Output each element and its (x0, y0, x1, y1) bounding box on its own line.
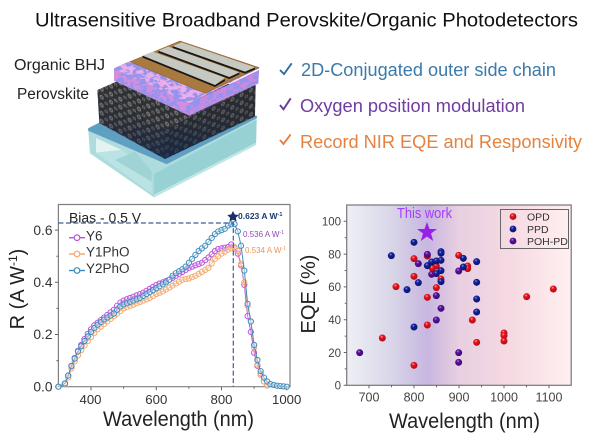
x axis title: Wavelength (nm) (389, 410, 540, 433)
value: Y2PhO peak: 0.623 A W (238, 211, 278, 221)
metal electrode strips (143, 42, 255, 87)
y tick labels: 80 (328, 250, 341, 262)
bullet 1: 2D-Conjugated outer side chain (301, 59, 556, 80)
bullet 2: Oxygen position modulation (300, 96, 525, 116)
curve: Y2PhO (58, 224, 287, 387)
y axis title: EQE (%) (298, 255, 320, 333)
value: Y1PhO peak: 0.534 A W (245, 246, 281, 255)
y axis title: -1 (6, 255, 20, 266)
y tick labels: 20 (328, 348, 341, 360)
x tick labels: 600 (145, 392, 167, 407)
value: Y1PhO peak: -1 (281, 246, 286, 252)
responsivity chart (6, 204, 301, 431)
legend: Y2PhO (86, 261, 130, 276)
value: Y6 peak: 0.536 A W (243, 230, 279, 239)
x tick labels: 800 (210, 392, 233, 407)
curve: Y1PhO (58, 247, 267, 387)
glass substrate box (88, 118, 257, 197)
points: OPD (379, 252, 557, 369)
icon: check purple (280, 98, 291, 109)
label: Perovskite: Perovskite (17, 86, 89, 103)
label: Organic BHJ: Organic BHJ (14, 57, 105, 74)
brown interlayer (130, 41, 259, 93)
points: PPD (388, 239, 480, 330)
perovskite block (97, 80, 256, 159)
y tick labels: 100 (322, 216, 341, 228)
icon: peak star (227, 211, 239, 222)
legend: OPD (527, 212, 550, 224)
y tick labels: 0.4 (33, 275, 53, 290)
title: Ultrasensitive Broadband Perovskite/Organic Photodetectors (35, 10, 578, 32)
x tick labels: 1000 (490, 390, 518, 404)
y axis title: ) (7, 249, 29, 255)
peak dashed guide lines (58, 223, 233, 387)
icon: check orange (280, 134, 291, 144)
organic BHJ layer (114, 61, 259, 116)
x tick labels: 1100 (536, 390, 562, 404)
x tick labels: 400 (79, 392, 102, 407)
y tick labels: 0 (335, 380, 341, 392)
icon: check blue (280, 63, 292, 74)
value: Y2PhO peak: -1 (278, 212, 282, 218)
y tick labels: 60 (328, 282, 341, 294)
points: POH-PD (356, 251, 462, 366)
x axis title: Wavelength (nm) (103, 408, 254, 431)
x tick labels (359, 390, 562, 404)
icon: this work star (417, 222, 437, 241)
annotation: this work: This work (397, 206, 453, 222)
legend (69, 228, 130, 276)
x tick labels: 900 (449, 390, 469, 404)
x tick labels: 800 (404, 390, 424, 404)
x tick labels: 1000 (272, 392, 301, 407)
scatter points (356, 239, 557, 369)
y tick labels: 0.6 (33, 223, 53, 238)
legend: Y1PhO (86, 244, 130, 260)
legend: PPD (527, 224, 549, 236)
blue substrate sheet (88, 90, 257, 164)
y tick labels: 0.0 (33, 380, 53, 394)
curve: Y6 (58, 244, 267, 387)
y tick labels (322, 216, 341, 392)
legend (500, 210, 568, 248)
y tick labels: 40 (328, 315, 341, 327)
curves (58, 224, 287, 387)
plot frame (58, 204, 290, 387)
y tick labels: 0.2 (33, 327, 52, 342)
legend: POH-PD (527, 236, 568, 248)
bullet 3: Record NIR EQE and Responsivity (300, 132, 583, 152)
y axis title: R (A W (7, 266, 29, 329)
EQE scatter chart (298, 205, 571, 433)
x tick labels (79, 392, 301, 407)
plot background (347, 205, 571, 385)
y tick labels (33, 223, 53, 394)
x tick labels: 700 (359, 390, 379, 404)
legend: Y6 (86, 228, 103, 244)
value: Y6 peak: -1 (279, 230, 284, 236)
device stack illustration (88, 41, 259, 197)
bias label: Bias - 0.5 V (69, 210, 142, 226)
